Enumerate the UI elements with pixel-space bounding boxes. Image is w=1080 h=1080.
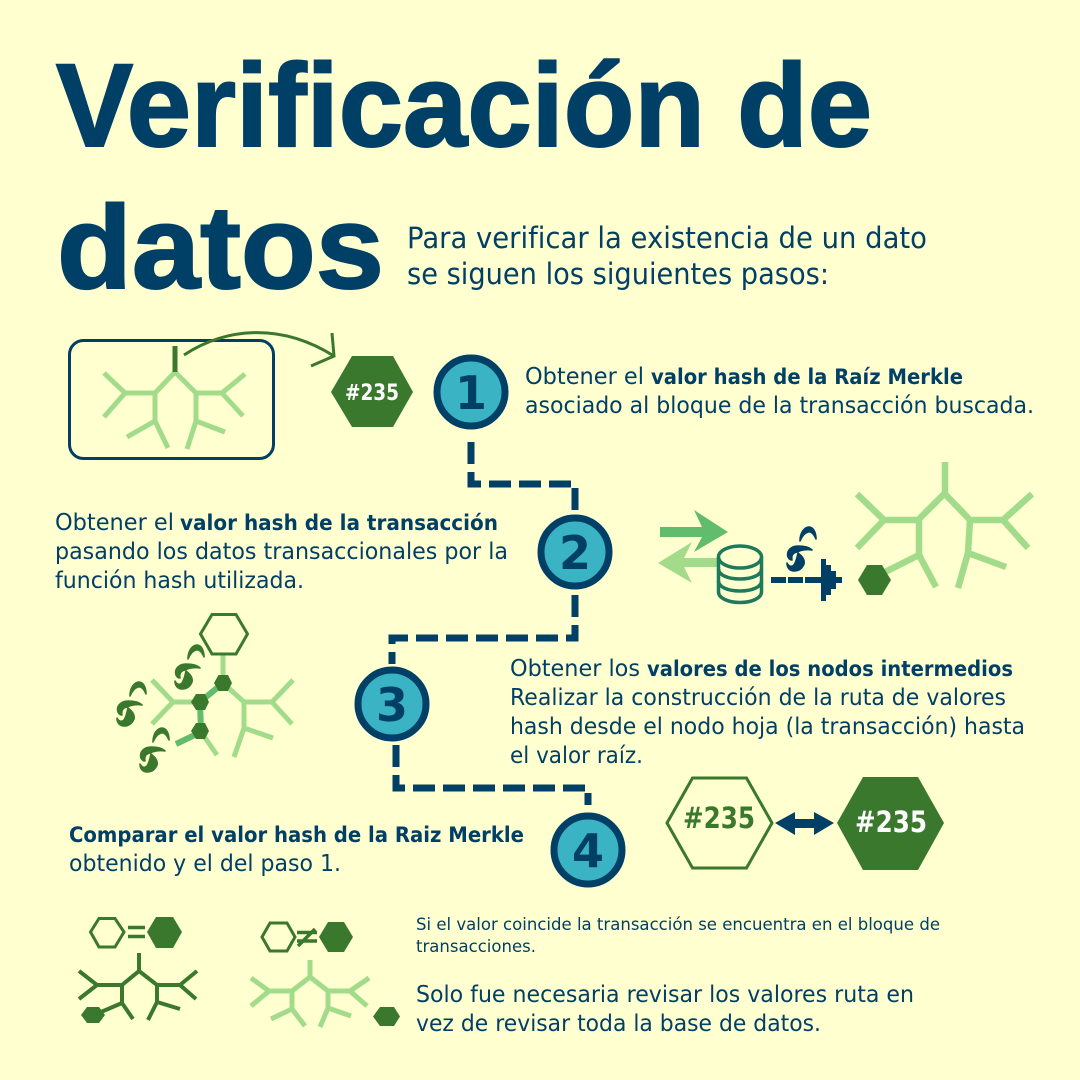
step number 4: [554, 816, 622, 884]
result: hash matches: [79, 917, 197, 1023]
filled hexagon #235: [837, 777, 944, 870]
step 1 text: valor hash de la Raíz Merkle: [651, 365, 963, 389]
step 4 text: [69, 823, 524, 877]
filled hexagon #235: #235: [855, 805, 927, 839]
step 2 text: pasando los datos transaccionales por la: [55, 539, 508, 565]
dashed connector: step 3 to 4: [396, 745, 588, 805]
conclusion note: [416, 915, 940, 957]
intro text: se siguen los siguientes pasos:: [407, 257, 829, 291]
path nodes: [191, 675, 232, 739]
step 4 icon: hash comparison: [667, 777, 944, 870]
dashed connector: step 1 to 2: [471, 442, 575, 510]
hash hexagon #235: [331, 356, 413, 427]
step 1 text: asociado al bloque de la transacción buscada.: [525, 393, 1034, 419]
outline hexagon #235: [667, 778, 772, 868]
title: Verificación de: [56, 40, 872, 172]
step 2 text: [55, 510, 508, 594]
conclusion text: Solo fue necesaria revisar los valores ruta en: [416, 982, 914, 1008]
intro text: [407, 221, 927, 291]
dashed connector: step 2 to 3: [392, 595, 575, 664]
icon: root hexagon outline: [200, 614, 248, 654]
step 2 text: valor hash de la transacción: [180, 511, 498, 535]
step number 2: 2: [559, 526, 591, 580]
title: datos: [57, 182, 384, 314]
conclusion note: Si el valor coincide la transacción se encuentra en el bloque de: [416, 915, 940, 935]
step 2 icon: transactions database and hash function: [658, 510, 842, 602]
step 1 icon: merkle tree box: [70, 340, 274, 458]
step 2 text: Obtener el: [55, 510, 174, 536]
step 1 text: Obtener el: [525, 364, 644, 390]
intro text: Para verificar la existencia de un dato: [407, 221, 927, 255]
icon: dashed pixel arrow: [771, 559, 842, 601]
step number 3: 3: [376, 678, 408, 732]
arrow: root to hash: [184, 333, 334, 366]
icon: database: [718, 546, 762, 602]
icon: transaction arrows: [658, 510, 728, 583]
step 3 text: Realizar la construcción de la ruta de valores: [510, 685, 1006, 711]
step 3 text: hash desde el nodo hoja (la transacción) hasta: [510, 714, 1025, 740]
step 1 text: [525, 364, 1034, 419]
step 3 text: el valor raíz.: [510, 743, 643, 769]
step 3 icon: tree with path nodes: [117, 614, 293, 772]
conclusion note: transacciones.: [416, 937, 536, 957]
step 2 text: función hash utilizada.: [55, 568, 304, 594]
step 4 text: obtenido y el del paso 1.: [69, 851, 341, 877]
icon: hash swirls: [117, 645, 204, 772]
hash hexagon #235: #235: [345, 381, 399, 406]
double arrow: [775, 812, 834, 835]
step number 2: [541, 518, 609, 586]
step 3 text: Obtener los: [510, 656, 640, 682]
step 2 tree with leaf hexagon: [857, 462, 1032, 595]
step 3 text: [510, 656, 1025, 769]
step 4 text: Comparar el valor hash de la Raiz Merkle: [69, 823, 524, 847]
step number 3: [358, 670, 426, 738]
outline hexagon #235: #235: [683, 801, 755, 835]
step number 1: 1: [455, 366, 487, 420]
step 3 text: valores de los nodos intermedios: [647, 657, 1013, 681]
conclusion text: [416, 982, 914, 1037]
title: [56, 40, 872, 314]
step number 4: 4: [572, 824, 604, 878]
step number 1: [437, 358, 505, 426]
icon: hash swirl: [787, 527, 816, 571]
conclusion text: vez de revisar toda la base de datos.: [416, 1011, 821, 1037]
result: hash differs: [251, 922, 400, 1027]
